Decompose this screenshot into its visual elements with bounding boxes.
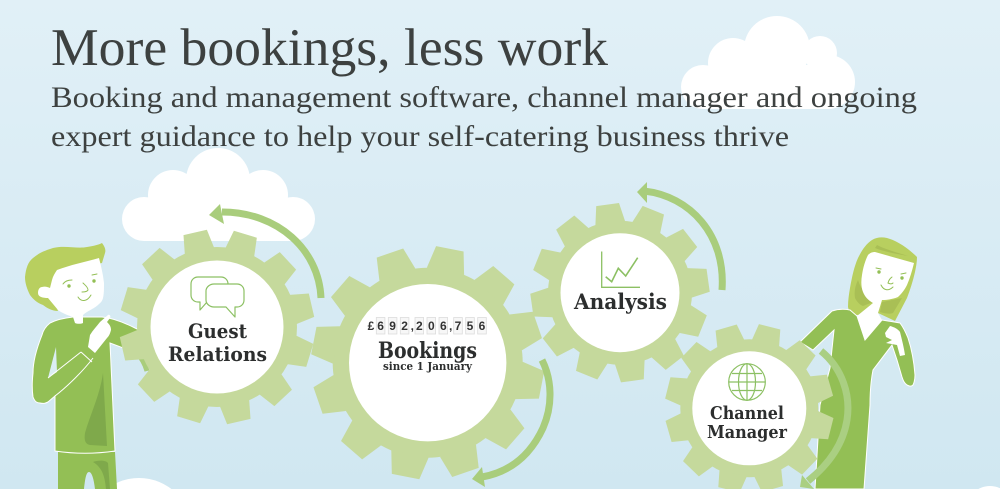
gear: guest relations — [119, 229, 315, 425]
subtitle — [51, 81, 917, 153]
person: woman — [800, 237, 917, 489]
label: channel manager: Manager — [707, 422, 787, 443]
label: channel manager — [707, 403, 787, 443]
man torso and arm — [32, 317, 150, 453]
man facial features — [63, 274, 97, 301]
counter: bookings total: 7 — [455, 319, 462, 333]
man torso shadow — [85, 373, 107, 446]
counter: bookings total: 0 — [428, 319, 435, 333]
man arm gap — [48, 347, 57, 378]
gear: analysis — [530, 202, 710, 383]
man sleeve lines — [48, 352, 93, 396]
gear: bookings — [310, 245, 545, 480]
counter: bookings total — [368, 318, 486, 334]
counter: bookings total: 6 — [479, 319, 486, 333]
woman facial features — [876, 268, 906, 290]
man hair — [25, 243, 105, 311]
woman face and neck — [857, 252, 914, 340]
label: channel manager: Channel — [710, 403, 784, 424]
gear: channel manager — [664, 323, 834, 489]
counter: bookings total: 6 — [377, 319, 384, 333]
counter: bookings total: , — [411, 319, 414, 333]
arrow: small arc behind guest relations gear — [136, 352, 147, 371]
label: guest relations: Relations — [168, 343, 267, 366]
cloud: bottom right — [966, 486, 1000, 489]
icon: line chart — [602, 252, 640, 287]
cloud: bottom left — [86, 478, 192, 489]
subtitle: Booking and management software, channel manager and ongoing — [51, 81, 917, 114]
icon: globe — [729, 364, 765, 400]
man face — [38, 258, 104, 324]
arrow: analysis — [637, 182, 722, 290]
person: man pointing — [25, 243, 150, 489]
subtitle: expert guidance to help your self-catering business thrive — [51, 120, 789, 153]
woman dress and arm — [800, 309, 915, 489]
woman hand — [885, 326, 905, 356]
label: analysis: Analysis — [573, 289, 667, 314]
counter: bookings total: , — [449, 319, 452, 333]
woman fringe — [875, 245, 908, 256]
counter: bookings total: 6 — [440, 319, 447, 333]
counter: bookings total: £ — [368, 319, 375, 333]
counter: bookings total: 2 — [401, 319, 408, 333]
counter: bookings total: 9 — [389, 319, 396, 333]
icon: speech bubbles — [191, 277, 244, 317]
label: since 1 January: since 1 January — [383, 359, 472, 373]
woman hair — [848, 237, 917, 321]
arrow: channel manager — [800, 351, 848, 489]
cloud: top right — [681, 16, 855, 109]
label: bookings: Bookings — [378, 338, 477, 364]
man legs — [58, 452, 117, 489]
label: guest relations — [168, 320, 267, 366]
counter: bookings total: 5 — [467, 319, 474, 333]
title: More bookings, less work — [51, 19, 609, 77]
counter: bookings total: 2 — [416, 319, 423, 333]
cloud: behind guest relations gear — [122, 148, 315, 241]
woman hair shadows — [855, 280, 902, 314]
label: guest relations: Guest — [188, 320, 247, 343]
man hand — [88, 315, 111, 353]
arrow: bookings — [472, 360, 550, 487]
arrow: guest relations — [209, 204, 321, 298]
